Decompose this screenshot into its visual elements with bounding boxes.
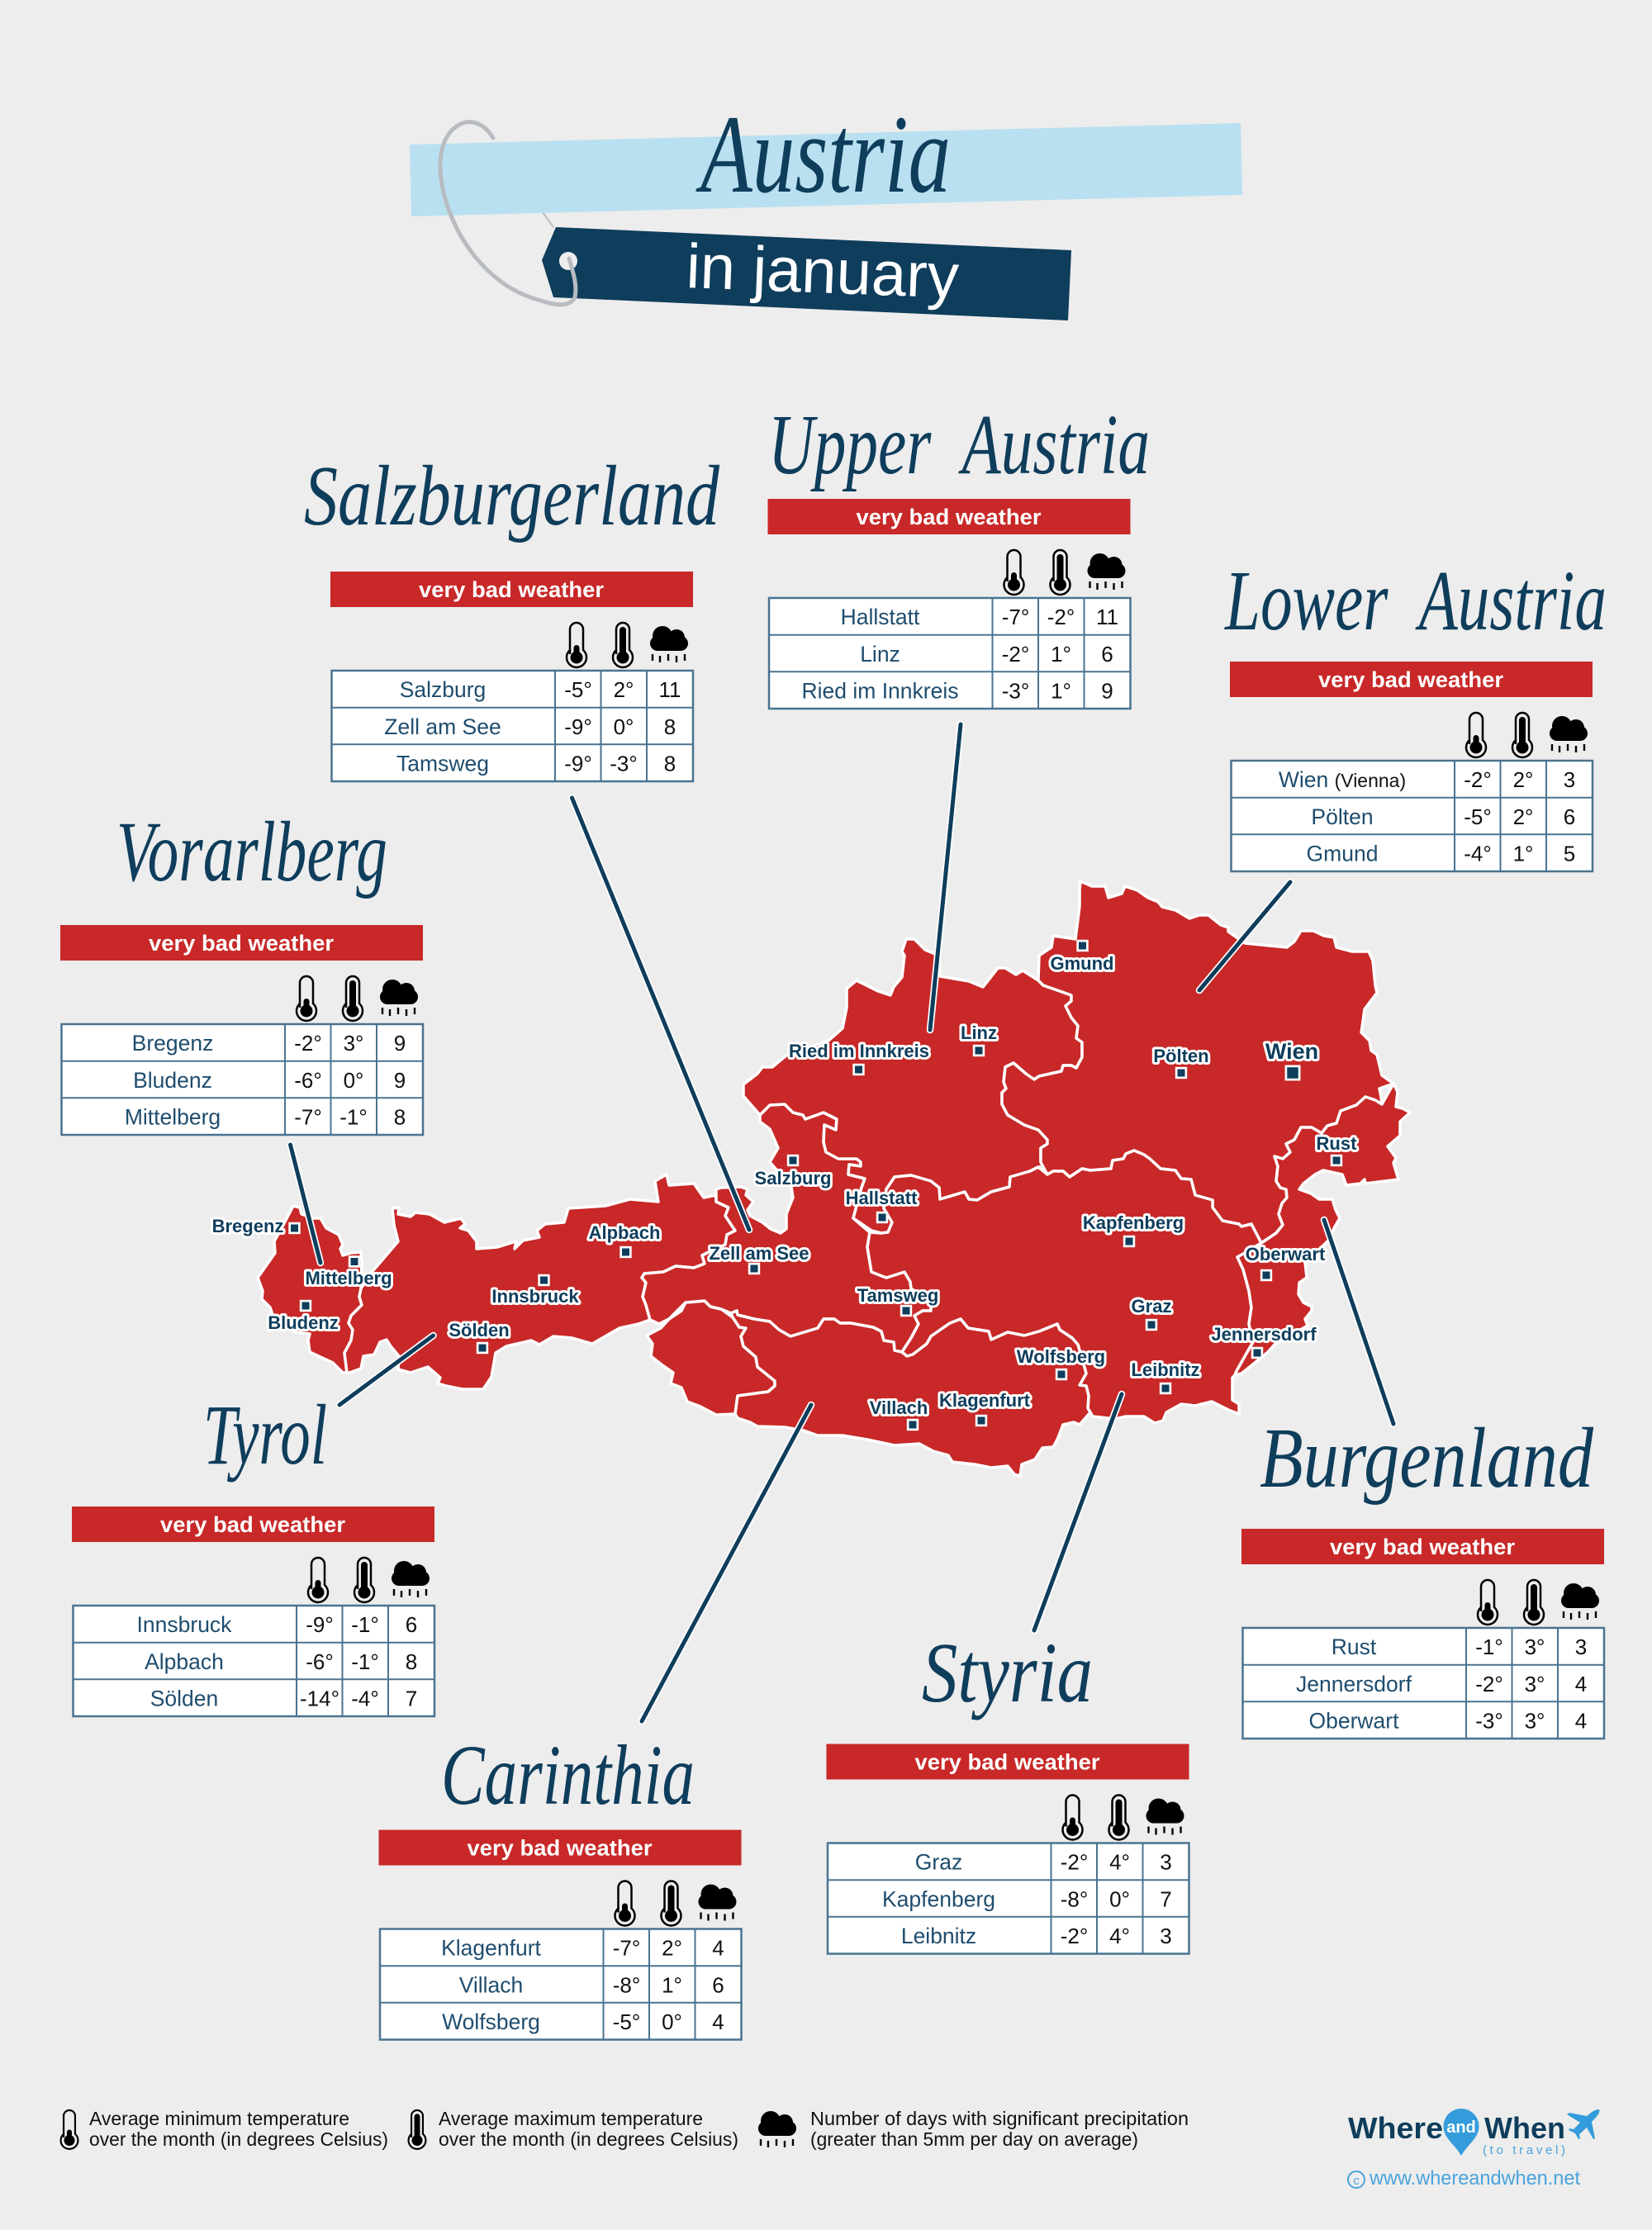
city: Oberwart: Oberwart	[1246, 1244, 1326, 1264]
city: Tamsweg: Tamsweg	[857, 1285, 938, 1306]
weather table: Upper Austria: -7°	[1002, 605, 1029, 629]
city: Alpbach	[589, 1222, 660, 1257]
logo: Where and When: When	[1484, 2111, 1565, 2145]
weather table: Upper Austria: 11	[1096, 605, 1118, 629]
heading: Austria: Austria	[695, 93, 951, 216]
weather table: Styria: 4°	[1109, 1850, 1130, 1875]
weather table: Vorarlberg: Mittelberg	[125, 1105, 221, 1130]
region: Upper Austria	[743, 939, 1082, 1233]
weather table: Carinthia: 4	[712, 2009, 724, 2034]
weather table: Lower Austria: 2°	[1513, 767, 1533, 792]
city: Klagenfurt	[939, 1390, 1031, 1426]
heading: Vorarlberg: Vorarlberg	[116, 804, 387, 899]
weather table: Salzburgerland: very bad weather	[419, 577, 604, 602]
weather table: Salzburgerland: 0°	[614, 714, 634, 739]
weather table: Tyrol: 6	[406, 1612, 417, 1637]
weather table: Burgenland: Oberwart	[1309, 1708, 1399, 1733]
weather table: Vorarlberg: very bad weather	[149, 931, 334, 956]
city: Villach: Villach	[870, 1397, 928, 1418]
weather table: Carinthia: -8°	[613, 1972, 640, 1997]
weather table: Upper Austria: Linz	[860, 642, 900, 667]
weather table: Lower Austria	[1230, 662, 1593, 871]
city: Bludenz	[268, 1301, 339, 1333]
weather table: Lower Austria: -4°	[1464, 841, 1492, 866]
panel: Styria	[826, 1625, 1189, 1954]
leader: Upper Austria	[930, 724, 961, 1030]
leader: Burgenland	[1324, 1220, 1393, 1424]
string behind band	[543, 212, 553, 227]
weather table: Tyrol: -1°	[351, 1649, 379, 1674]
weather table: Salzburgerland	[330, 572, 693, 781]
leader: Styria	[1034, 1394, 1122, 1630]
logo: Where and When: (to travel)	[1483, 2143, 1565, 2157]
weather table: Burgenland: 4	[1575, 1708, 1587, 1733]
city: Graz	[1132, 1296, 1171, 1330]
legend	[61, 2108, 1189, 2150]
region: Carinthia	[731, 1311, 1090, 1476]
weather table: Salzburgerland: 8	[664, 752, 676, 776]
leader: Salzburgerland	[572, 798, 749, 1230]
leader: Vorarlberg	[291, 1145, 320, 1263]
legend: maximum temperature: over the month (in degrees Celsius)	[439, 2128, 738, 2150]
legend: precipitation days: Number of days with significant precipitation	[810, 2108, 1189, 2129]
panel: Burgenland	[1241, 1411, 1604, 1739]
weather table: Burgenland: Rust	[1332, 1635, 1377, 1659]
heading: Styria: Styria	[922, 1625, 1093, 1720]
map of Austria	[258, 881, 1410, 1476]
leader: Tyrol	[339, 1336, 433, 1405]
weather table: Lower Austria: 5	[1564, 841, 1575, 866]
weather table: Burgenland: 4	[1575, 1672, 1587, 1696]
weather table: Lower Austria: Gmund	[1307, 841, 1378, 866]
weather table: Burgenland: 3°	[1525, 1672, 1545, 1696]
weather table: Carinthia: 4	[712, 1936, 724, 1961]
city: Klagenfurt: Klagenfurt	[939, 1390, 1031, 1411]
weather table: Vorarlberg: -1°	[339, 1105, 368, 1130]
legend: precipitation days	[758, 2108, 1189, 2150]
weather table: Upper Austria: Hallstatt	[841, 605, 920, 629]
weather table: Upper Austria: -2°	[1047, 605, 1075, 629]
legend: minimum temperature: over the month (in degrees Celsius)	[89, 2128, 388, 2150]
city: Leibnitz: Leibnitz	[1131, 1359, 1200, 1380]
region: Burgenland	[1235, 1084, 1410, 1375]
logo: Where and When: and	[1446, 2118, 1476, 2137]
weather table: Vorarlberg: Bregenz	[132, 1031, 213, 1056]
weather table: Styria: -2°	[1061, 1850, 1088, 1875]
city: Zell am See: Zell am See	[709, 1243, 809, 1264]
weather table: Tyrol: very bad weather	[160, 1512, 345, 1537]
weather table: Vorarlberg: -2°	[294, 1031, 322, 1056]
city: Sölden: Sölden	[449, 1320, 510, 1340]
weather table: Upper Austria: Ried im Innkreis	[802, 679, 958, 704]
weather table: Vorarlberg: 0°	[344, 1068, 363, 1093]
weather table: Tyrol	[72, 1506, 434, 1716]
weather table: Styria: -8°	[1061, 1886, 1088, 1911]
weather table: Carinthia: Villach	[459, 1972, 523, 1997]
weather table: Styria: 7	[1160, 1886, 1172, 1911]
weather table: Salzburgerland: 8	[664, 714, 676, 739]
city: Sölden	[449, 1320, 510, 1353]
weather table: Lower Austria: very bad weather	[1318, 667, 1503, 692]
weather table: Burgenland: -2°	[1475, 1672, 1503, 1696]
city: Innsbruck: Innsbruck	[491, 1286, 579, 1307]
weather table: Upper Austria: 6	[1101, 642, 1113, 667]
city: Hallstatt: Hallstatt	[846, 1188, 918, 1208]
city: Salzburg: Salzburg	[755, 1168, 831, 1189]
city: Hallstatt	[846, 1188, 918, 1222]
city: Wolfsberg	[1017, 1346, 1105, 1379]
city: Tamsweg	[857, 1285, 938, 1316]
navy luggage tag	[542, 227, 1071, 320]
city: Rust: Rust	[1317, 1133, 1357, 1154]
weather table: Vorarlberg: 9	[394, 1031, 406, 1056]
weather table: Carinthia: -5°	[613, 2009, 640, 2034]
region: Lower Austria	[1002, 881, 1393, 1243]
weather table: Styria: very bad weather	[915, 1749, 1100, 1774]
weather table: Styria: Kapfenberg	[882, 1886, 995, 1911]
weather table: Lower Austria: -5°	[1464, 804, 1492, 829]
weather table: Styria: 3	[1160, 1924, 1172, 1948]
weather table: Carinthia: 2°	[662, 1936, 682, 1961]
city: Ried im Innkreis: Ried im Innkreis	[789, 1041, 929, 1061]
icon: airplane	[1567, 2109, 1599, 2139]
weather table: Lower Austria: Wien (Vienna)	[1279, 767, 1406, 792]
leader: Lower Austria	[1199, 882, 1290, 990]
heading: Salzburgerland: Salzburgerland	[304, 448, 720, 543]
region: Salzburgerland	[642, 1104, 931, 1352]
weather table: Burgenland: -1°	[1475, 1635, 1503, 1659]
city: Villach	[870, 1397, 928, 1430]
weather table: Lower Austria: -2°	[1464, 767, 1492, 792]
legend: maximum temperature: Average maximum temperature	[439, 2108, 703, 2129]
weather table: Lower Austria: 3	[1564, 767, 1575, 792]
logo: Where and When: Where	[1348, 2111, 1443, 2145]
weather table: Salzburgerland: Tamsweg	[396, 752, 489, 776]
weather table: Lower Austria: 1°	[1513, 841, 1533, 866]
logo: Where and When	[1348, 2109, 1599, 2190]
city: Bludenz: Bludenz	[268, 1312, 339, 1333]
light blue band	[410, 123, 1242, 216]
city: Gmund	[1051, 941, 1113, 974]
weather table: Tyrol: Sölden	[150, 1687, 218, 1711]
weather table: Vorarlberg: 9	[394, 1068, 406, 1093]
weather table: Salzburgerland: -9°	[564, 714, 592, 739]
city: Pölten: Pölten	[1153, 1046, 1209, 1066]
weather table: Carinthia: -7°	[613, 1936, 640, 1961]
copyright symbol	[1348, 2171, 1365, 2188]
city: Rust	[1317, 1133, 1357, 1165]
weather table: Upper Austria: 1°	[1051, 642, 1071, 667]
weather table: Burgenland: very bad weather	[1330, 1535, 1515, 1559]
city: Alpbach: Alpbach	[589, 1222, 660, 1243]
weather table: Burgenland: 3°	[1525, 1635, 1545, 1659]
weather table: Burgenland: 3	[1575, 1635, 1587, 1659]
city: Linz: Linz	[961, 1022, 997, 1043]
weather table: Tyrol: -1°	[351, 1612, 379, 1637]
weather table: Carinthia: Klagenfurt	[441, 1936, 542, 1961]
city: Zell am See	[709, 1243, 809, 1274]
weather table: Burgenland: Jennersdorf	[1296, 1672, 1412, 1696]
city: Linz	[961, 1022, 997, 1056]
city: Kapfenberg: Kapfenberg	[1083, 1212, 1184, 1233]
weather table: Styria: Leibnitz	[901, 1924, 976, 1948]
weather table: Tyrol: Alpbach	[145, 1649, 224, 1674]
weather table: Vorarlberg	[60, 925, 423, 1135]
region: Styria	[867, 1151, 1261, 1423]
city: Oberwart	[1246, 1244, 1326, 1280]
weather table: Carinthia	[378, 1830, 742, 2040]
weather table: Vorarlberg: -6°	[294, 1068, 322, 1093]
weather table: Tyrol: -14°	[300, 1687, 339, 1711]
heading: Tyrol: Tyrol	[203, 1388, 327, 1483]
weather table: Tyrol: 7	[406, 1687, 417, 1711]
city: Wien	[1265, 1039, 1318, 1079]
panel: Salzburgerland	[304, 448, 720, 781]
weather table: Salzburgerland: 11	[659, 677, 681, 702]
title banner	[410, 93, 1242, 320]
city: Jennersdorf	[1211, 1324, 1317, 1358]
weather table: Salzburgerland: 2°	[614, 677, 634, 702]
city: Leibnitz	[1131, 1359, 1200, 1393]
copyright symbol: c	[1353, 2174, 1360, 2188]
weather table: Upper Austria: very bad weather	[856, 505, 1042, 529]
weather table: Carinthia: 0°	[662, 2009, 682, 2034]
heading: Carinthia: Carinthia	[441, 1728, 695, 1823]
weather table: Vorarlberg: 8	[394, 1105, 406, 1130]
weather table: Styria: 0°	[1109, 1886, 1130, 1911]
weather table: Salzburgerland: Zell am See	[384, 714, 501, 739]
weather table: Salzburgerland: -5°	[564, 677, 592, 702]
weather table: Upper Austria: 9	[1101, 679, 1113, 704]
leader lines	[291, 724, 1393, 1721]
city: Wolfsberg: Wolfsberg	[1017, 1346, 1105, 1367]
city: Kapfenberg	[1083, 1212, 1184, 1246]
weather table: Burgenland: -3°	[1475, 1708, 1503, 1733]
weather table: Vorarlberg: Bludenz	[133, 1068, 212, 1093]
tag hole	[559, 252, 577, 270]
weather table: Styria	[826, 1744, 1189, 1954]
legend: precipitation days: (greater than 5mm per day on average)	[810, 2128, 1138, 2150]
city: Bregenz: Bregenz	[212, 1216, 283, 1236]
weather table: Lower Austria: Pölten	[1311, 804, 1374, 829]
weather table: Tyrol: -4°	[351, 1687, 379, 1711]
panel: Upper Austria	[768, 397, 1150, 709]
city: Pölten	[1153, 1046, 1209, 1078]
weather table: Styria: -2°	[1061, 1924, 1088, 1948]
weather table: Salzburgerland: -9°	[564, 752, 592, 776]
city: Ried im Innkreis	[789, 1041, 929, 1075]
weather table: Carinthia: very bad weather	[468, 1835, 653, 1860]
weather table: Salzburgerland: -3°	[610, 752, 638, 776]
heading: Upper Austria: Upper Austria	[768, 397, 1150, 492]
tag string	[440, 122, 576, 305]
panel: Tyrol	[72, 1388, 434, 1716]
icon: map pin	[1444, 2109, 1479, 2156]
weather table: Carinthia: 1°	[662, 1972, 682, 1997]
legend: minimum temperature	[61, 2108, 388, 2150]
city: Jennersdorf: Jennersdorf	[1211, 1324, 1317, 1345]
city: Mittelberg: Mittelberg	[305, 1268, 392, 1288]
weather table: Styria: 4°	[1109, 1924, 1130, 1948]
weather table: Tyrol: 8	[406, 1649, 417, 1674]
weather table: Lower Austria: 6	[1564, 804, 1575, 829]
weather table: Upper Austria	[768, 499, 1130, 709]
website url: www.whereandwhen.net	[1369, 2167, 1580, 2190]
region: East Tyrol	[647, 1301, 775, 1415]
weather table: Styria: Graz	[915, 1850, 962, 1875]
weather table: Burgenland	[1241, 1529, 1604, 1739]
weather table: Tyrol: Innsbruck	[137, 1612, 232, 1637]
city markers and labels	[212, 941, 1357, 1430]
legend: maximum temperature	[409, 2108, 738, 2150]
region: Vorarlberg	[258, 1206, 362, 1373]
heading: Burgenland: Burgenland	[1260, 1411, 1594, 1506]
leader: Carinthia	[642, 1405, 811, 1721]
weather table: Tyrol: -9°	[306, 1612, 334, 1637]
city: Salzburg	[755, 1155, 831, 1189]
city: Innsbruck	[491, 1275, 579, 1307]
panel: Lower Austria	[1224, 553, 1607, 871]
panel: Vorarlberg	[60, 804, 423, 1135]
weather table: Upper Austria: -2°	[1002, 642, 1029, 667]
weather table: Tyrol: -6°	[306, 1649, 334, 1674]
city: Mittelberg	[305, 1257, 392, 1288]
weather table: Lower Austria: 2°	[1513, 804, 1533, 829]
city: Wien: Wien	[1265, 1039, 1318, 1064]
weather table: Carinthia: 6	[712, 1972, 724, 1997]
weather table: Salzburgerland: Salzburg	[400, 677, 486, 702]
weather table: Vorarlberg: 3°	[344, 1031, 363, 1056]
weather table: Burgenland: 3°	[1525, 1708, 1545, 1733]
weather table: Upper Austria: -3°	[1002, 679, 1029, 704]
weather table: Vorarlberg: -7°	[294, 1105, 322, 1130]
weather table: Carinthia: Wolfsberg	[442, 2009, 540, 2034]
heading: in january: in january	[685, 231, 960, 312]
city: Graz: Graz	[1132, 1296, 1171, 1317]
legend: minimum temperature: Average minimum temperature	[89, 2108, 349, 2129]
panel: Carinthia	[378, 1728, 742, 2040]
weather table: Styria: 3	[1160, 1850, 1172, 1875]
region: Tyrol	[344, 1174, 735, 1389]
weather table: Upper Austria: 1°	[1051, 679, 1071, 704]
city: Gmund: Gmund	[1051, 953, 1113, 974]
